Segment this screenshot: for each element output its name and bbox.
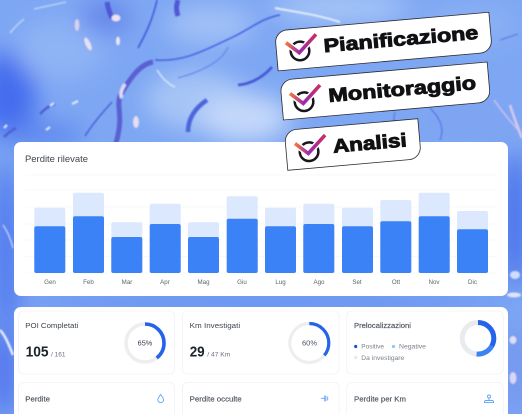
icon: check (294, 135, 327, 162)
label: Pianificazione (275, 12, 492, 71)
card: Km Investigati: / 47 Km (207, 352, 230, 359)
card: Perdite occulte (182, 382, 339, 414)
month axis labels: Lug (275, 279, 286, 286)
month axis labels: Mar (122, 279, 132, 286)
panel: Perdite rilevate chart (14, 142, 508, 296)
month axis labels: Mag (197, 279, 210, 286)
donut: prelocalizzazioni (462, 322, 494, 354)
month axis labels: Apr (160, 279, 170, 286)
heading: Perdite rilevate: Perdite rilevate (25, 153, 88, 164)
text: Pianificazione: Pianificazione (323, 23, 479, 57)
legend: Negative (399, 344, 426, 351)
card: Km Investigati (182, 311, 339, 374)
icon: location (484, 395, 494, 403)
label: Monitoraggio (280, 62, 491, 120)
month axis labels: Ott (392, 279, 400, 286)
legend: Da investigare (361, 355, 405, 362)
panel: KPI dashboard (14, 307, 508, 414)
card: Perdite per Km (347, 382, 503, 414)
month axis labels: Gen (44, 279, 56, 286)
label: Analisi (284, 119, 421, 170)
card: POI Completati (18, 311, 174, 374)
month axis labels: Set (352, 279, 362, 286)
card: Km Investigati: 29 (190, 344, 205, 361)
donut: 60% (290, 324, 329, 362)
icon: check (289, 85, 322, 112)
icon: signal (321, 396, 328, 402)
card: POI Completati: / 161 (51, 352, 66, 359)
card: Perdite occulte: Perdite occulte (190, 394, 242, 403)
month axis labels (44, 279, 477, 286)
donut: 65%: 65% (138, 341, 152, 348)
card: Prelocalizzazioni (347, 311, 503, 374)
card: Perdite (18, 382, 174, 414)
card: POI Completati: POI Completati (25, 321, 79, 330)
month axis labels: Nov (428, 279, 440, 286)
icon: check (285, 34, 318, 61)
text: Analisi: Analisi (332, 130, 408, 158)
card: Km Investigati: Km Investigati (190, 321, 241, 330)
month axis labels: Dic (468, 279, 477, 286)
donut: 60%: 60% (302, 341, 317, 348)
donut: 65% (126, 324, 164, 362)
card: Prelocalizzazioni: Prelocalizzazioni (354, 321, 411, 330)
legend (354, 344, 426, 362)
month axis labels: Giu (237, 279, 247, 286)
legend: Positive (361, 344, 384, 351)
text: Monitoraggio: Monitoraggio (328, 73, 477, 107)
card: Perdite per Km: Perdite per Km (354, 394, 406, 403)
month axis labels: Feb (83, 279, 94, 286)
card: Perdite: Perdite (25, 394, 50, 403)
card: POI Completati: 105 (26, 344, 49, 361)
bar chart: monthly leaks (34, 193, 488, 273)
month axis labels: Ago (313, 279, 325, 286)
icon: water drop (158, 394, 164, 403)
